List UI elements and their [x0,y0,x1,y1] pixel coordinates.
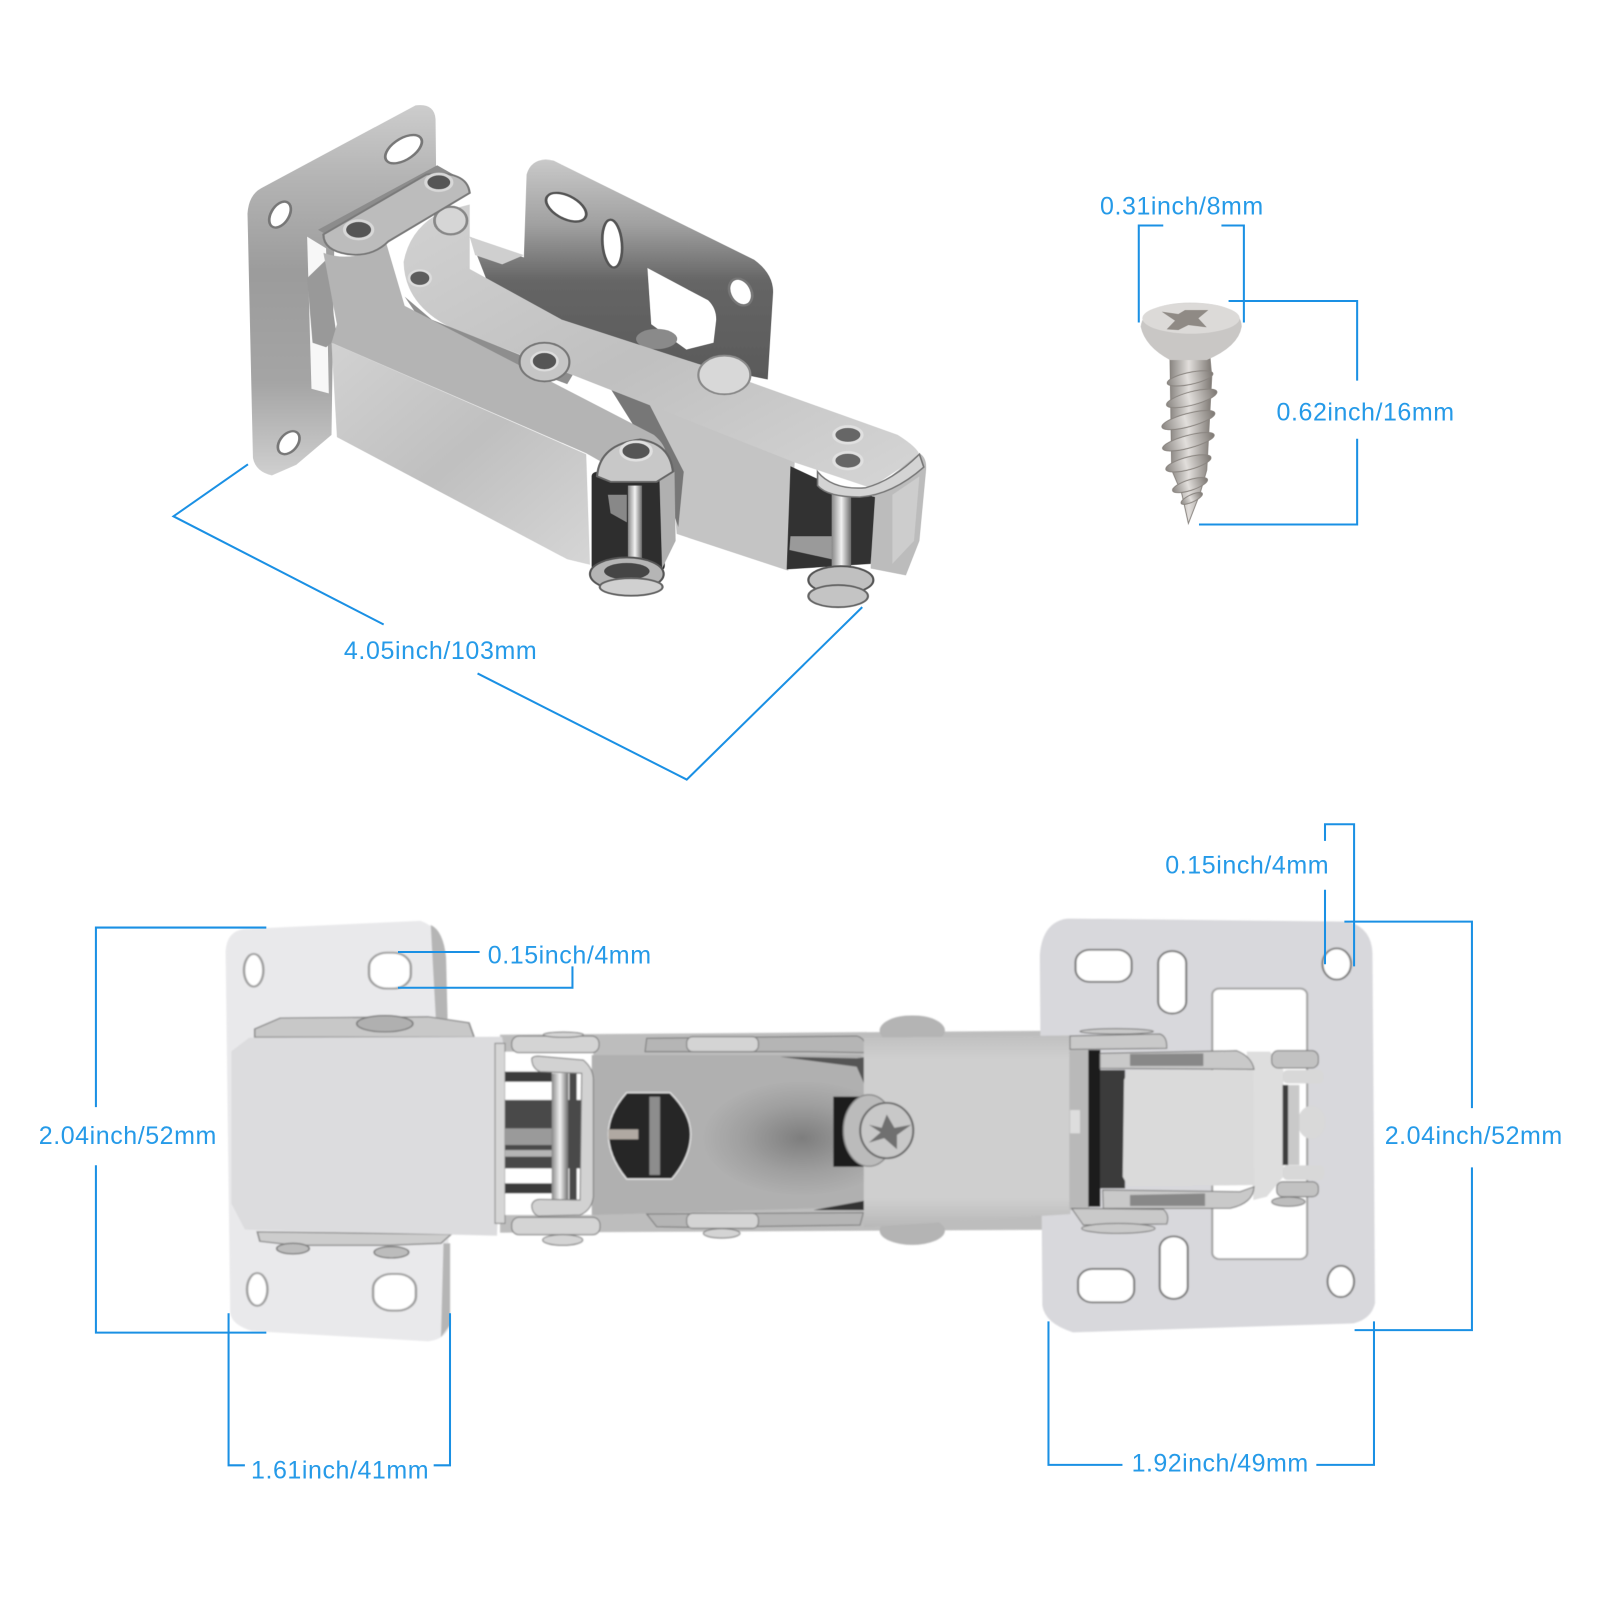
dimension: hinge length [173,464,862,780]
label: left plate height: 2.04inch/52mm [39,1122,216,1150]
right plate [864,918,1375,1332]
side cheek and black gap [1069,1050,1125,1210]
label: head width: 0.31inch/8mm [1100,192,1263,220]
dimension: left plate height [39,928,266,1333]
upper arm [404,204,919,488]
label: right plate width: 1.92inch/49mm [1132,1449,1308,1477]
right end cap [787,427,926,607]
label: right hole size: 0.15inch/4mm [1165,851,1329,879]
straight arm rails [500,1031,1082,1233]
screw shank and threads [1160,358,1219,523]
front face of cap [1123,1070,1254,1187]
phillips screw [843,1095,913,1166]
roller bracket [532,1056,593,1216]
lower rail [257,1232,451,1258]
right mounting plate [470,160,773,380]
label: length: 4.05inch/103mm [344,637,537,665]
screw head [1141,303,1242,360]
phillips recess [1162,310,1208,330]
upper rail [255,1016,474,1037]
screw photo [1141,303,1242,523]
middle section with roller [495,1032,868,1245]
hinge photo: flat open view [226,918,1375,1341]
dimension: screw length [1199,301,1454,524]
dimension: right hole size [1165,824,1354,966]
rails [1070,1029,1254,1233]
label: right plate height: 2.04inch/52mm [1385,1122,1562,1150]
left plate [226,921,474,1341]
dimension: screw head width [1100,192,1263,322]
dimension: left slot size [398,941,651,988]
hinge photo: angled view [248,105,926,607]
back spring arm [307,260,337,347]
link plate [323,174,569,381]
front box top face [323,241,666,476]
middle body [592,1055,868,1215]
label: left plate width: 1.61inch/41mm [251,1457,429,1485]
front roller assembly [590,439,676,596]
dimension: right plate width [1048,1321,1374,1477]
rear face of cap [1247,1052,1283,1200]
dark shadow under arms [611,389,684,527]
oval window [608,1093,691,1179]
screw bumps [880,1015,945,1245]
end cap assembly [1069,1029,1326,1233]
label: left slot size: 0.15inch/4mm [488,941,651,969]
toothed rails [645,1036,867,1227]
left box [232,1037,505,1236]
pin, tabs and nub [1272,1051,1326,1206]
roller window [495,1043,593,1223]
label: screw length: 0.62inch/16mm [1277,398,1454,426]
right box front face [640,398,795,571]
link rivets [512,1032,758,1245]
left mounting plate [248,105,453,475]
front box face [332,343,590,565]
dimension: right plate height [1344,922,1562,1330]
dimension: left plate width [229,1313,450,1485]
